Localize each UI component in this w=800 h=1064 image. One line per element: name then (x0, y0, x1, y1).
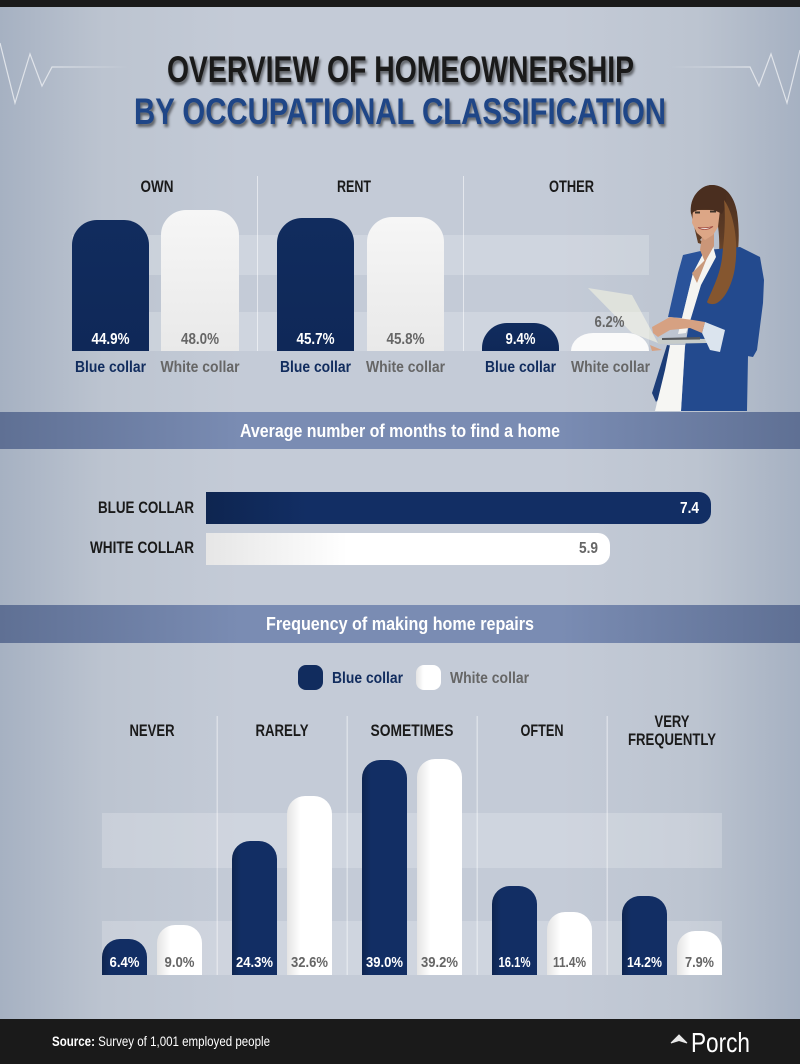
group: other (482, 177, 650, 376)
group: often (492, 721, 592, 975)
eyes (695, 212, 716, 213)
keyboard (662, 337, 700, 340)
group: often: OFTEN (520, 721, 564, 740)
title (134, 49, 666, 132)
title: OVERVIEW OF HOMEOWNERSHIP (167, 49, 634, 90)
group: sometimes: 39.2% (421, 954, 458, 971)
group: sometimes (362, 721, 462, 975)
legend: Blue collar (332, 670, 403, 687)
group: rent (277, 177, 445, 376)
group: rarely: 24.3% (236, 954, 273, 971)
group: other: OTHER (549, 177, 594, 196)
panel: homeownership status bars (72, 176, 650, 376)
group: rarely: RARELY (256, 721, 309, 740)
laptop base (658, 338, 707, 344)
front lock of hair (707, 200, 736, 304)
blazer lower left panel (652, 345, 680, 402)
group: own: 48.0% (181, 331, 219, 348)
logo: Porch (671, 1027, 750, 1058)
group: often: 11.4% (553, 954, 586, 971)
group: very frequently: VERY (654, 712, 690, 731)
section band: home repairs (0, 605, 800, 643)
other hand (650, 345, 662, 351)
face (692, 210, 720, 240)
fringe (691, 185, 726, 214)
group: very frequently (622, 712, 722, 975)
bar: blue collar (98, 492, 711, 524)
group: never: 9.0% (164, 954, 194, 971)
blazer body (681, 247, 764, 411)
hair back (691, 185, 739, 304)
legend (298, 665, 529, 690)
group: never: NEVER (130, 721, 174, 740)
group: rarely: 32.6% (291, 954, 328, 971)
section band: average months (0, 412, 800, 449)
sleeve cuff (702, 322, 725, 352)
group: never: 6.4% (110, 954, 140, 971)
group: other: Blue collar (485, 359, 556, 376)
decorative pulse line: right (671, 50, 800, 103)
shirt (678, 246, 716, 334)
group: sometimes: 39.0% (366, 954, 403, 971)
chest skin (692, 258, 707, 283)
group: rent: 45.7% (296, 331, 334, 348)
group: often: 16.1% (498, 954, 530, 971)
section band: average months: Average number of months to find a home (240, 421, 560, 441)
bar: blue collar: 7.4 (680, 500, 699, 517)
group: other: 9.4% (506, 331, 536, 348)
bar chart: months to find a home (90, 492, 711, 565)
source note: Source: Survey of 1,001 employed people (52, 1033, 270, 1049)
smile (698, 226, 713, 230)
group: rent: RENT (337, 177, 371, 196)
group: other: White collar (571, 359, 650, 376)
group: own (72, 177, 240, 376)
footer (0, 1019, 800, 1064)
panel: repair frequency bars (102, 712, 722, 975)
decorative pulse line: left (0, 43, 128, 103)
group: very frequently: FREQUENTLY (628, 730, 717, 749)
bar: white collar: WHITE COLLAR (90, 538, 194, 557)
group: sometimes: SOMETIMES (370, 721, 454, 740)
hand on laptop (652, 317, 705, 337)
group: rent: Blue collar (280, 359, 351, 376)
white trousers (655, 345, 685, 411)
bar: white collar: 5.9 (579, 540, 598, 557)
group: own: OWN (140, 177, 174, 196)
group: own: Blue collar (75, 359, 146, 376)
neck (700, 232, 714, 262)
blazer left panel (668, 250, 705, 318)
group: own: 44.9% (92, 331, 130, 348)
logo: Porch: Porch (691, 1027, 750, 1058)
group: own: White collar (160, 359, 240, 376)
group: rent: 45.8% (386, 331, 424, 348)
bar: blue collar: BLUE COLLAR (98, 498, 194, 517)
section band: home repairs: Frequency of making home repairs (266, 614, 534, 634)
group: rent: White collar (366, 359, 445, 376)
group: other: 6.2% (594, 314, 624, 331)
laptop lid (588, 288, 658, 343)
group: very frequently: 14.2% (627, 954, 662, 971)
legend: White collar (450, 670, 529, 687)
illustration: woman with laptop (588, 185, 764, 411)
title: BY OCCUPATIONAL CLASSIFICATION (134, 91, 666, 132)
group: rarely (232, 721, 332, 975)
group: never (102, 721, 202, 975)
group: very frequently: 7.9% (685, 954, 714, 971)
bar: white collar (90, 533, 610, 565)
